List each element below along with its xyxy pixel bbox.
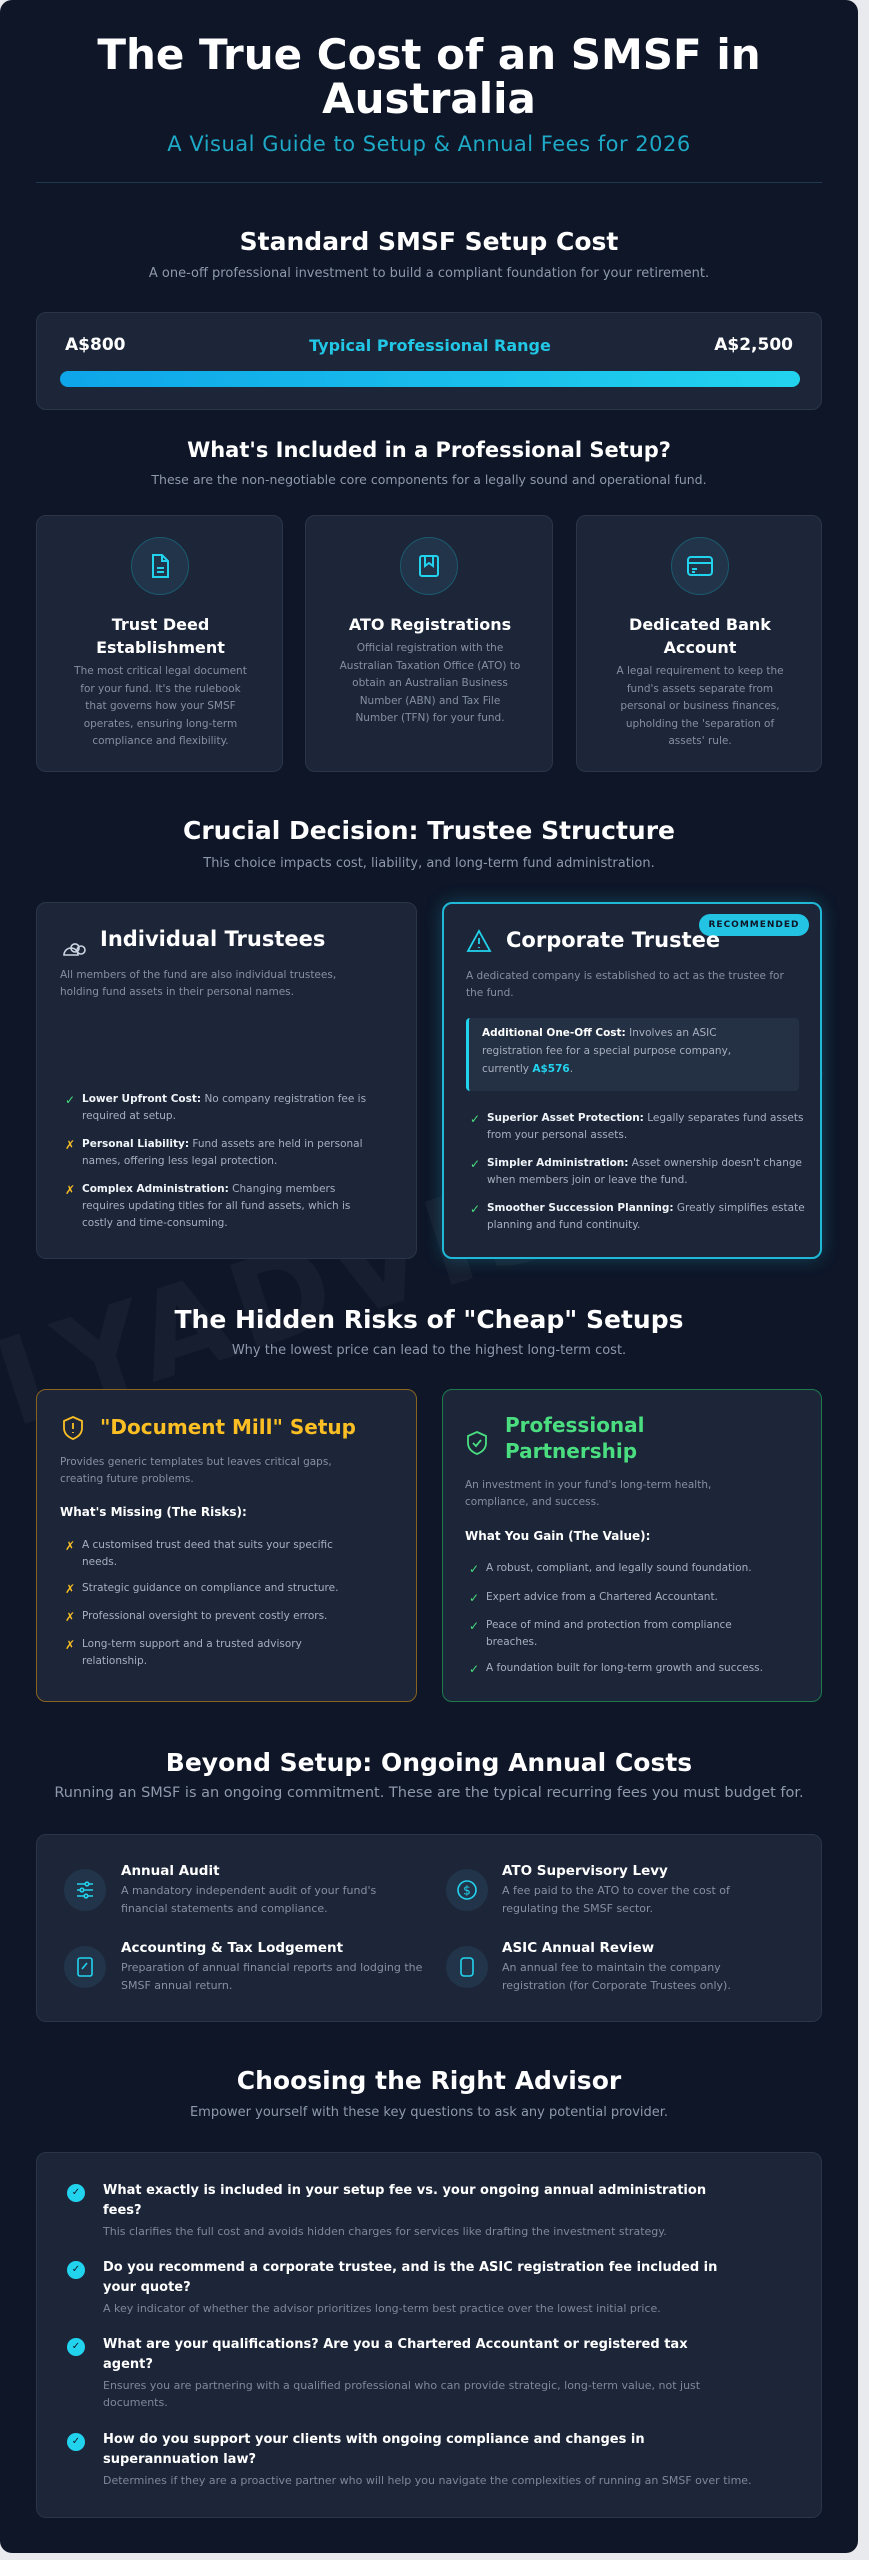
title: Australia	[322, 74, 536, 123]
text: that governs how your SMSF	[85, 700, 236, 712]
label range: Typical Professional Range	[309, 336, 551, 355]
title	[505, 1413, 645, 1463]
question 4: How do you support your clients with ongoing compliance and changes in superannuation law?	[103, 2432, 645, 2467]
heading: advisor: Choosing the Right Advisor	[237, 2066, 621, 2095]
list	[470, 1112, 805, 1231]
icon: shield alert	[63, 1416, 83, 1440]
text: obtain an Australian Business	[352, 677, 508, 689]
question 1: ✓	[72, 2187, 80, 2198]
list: Complex Administration: Changing members requires updating titles for all fund assets, which is costly and time-consuming.	[82, 1183, 350, 1229]
list: ✓	[469, 1619, 479, 1633]
item: audit: Annual Audit	[121, 1863, 220, 1879]
item: accounting	[64, 1940, 422, 1992]
list	[65, 1093, 366, 1229]
list: A robust, compliant, and legally sound foundation.	[486, 1562, 752, 1574]
icon: users	[63, 943, 86, 956]
text: Official registration with the	[357, 642, 503, 654]
card: bank	[576, 515, 822, 772]
title: "Document Mill" Setup	[100, 1415, 356, 1439]
subtext: annual: Running an SMSF is an ongoing commitment. These are the typical recurring fees you must budget for.	[54, 1785, 804, 1801]
list: ✗	[65, 1138, 75, 1152]
list: ✓	[469, 1662, 479, 1676]
list: A foundation built for long-term growth and success.	[486, 1662, 763, 1674]
text: personal or business finances,	[620, 700, 780, 712]
title: Trust Deed	[112, 615, 209, 634]
panel: corporate trustee	[442, 902, 822, 1259]
item: levy	[446, 1863, 730, 1915]
question 2: Do you recommend a corporate trustee, and is the ASIC registration fee included in your quote?	[103, 2260, 717, 2295]
list: ✗	[65, 1582, 75, 1596]
text: The most critical legal document	[74, 665, 247, 677]
item: accounting: Preparation of annual financial reports and lodging the SMSF annual return.	[121, 1961, 422, 1992]
subheading: What's Missing (The Risks):	[60, 1505, 247, 1519]
title: Establishment	[96, 638, 225, 657]
title: Partnership	[505, 1439, 637, 1463]
subtext: advisor: Empower yourself with these key questions to ask any potential provider.	[190, 2105, 668, 2120]
text	[616, 665, 784, 747]
heading: trustee: Crucial Decision: Trustee Structure	[183, 816, 675, 845]
question 2: A key indicator of whether the advisor prioritizes long-term best practice over the lowest initial price.	[103, 2302, 661, 2315]
text: operates, ensuring long-term	[84, 718, 237, 730]
subtext: trustee: This choice impacts cost, liability, and long-term fund administration.	[203, 856, 655, 871]
panel: individual trustees	[36, 902, 417, 1259]
list: ✓	[470, 1112, 480, 1126]
watermark: LYADVISORY	[0, 1049, 858, 1455]
question 2: ✓	[72, 2264, 80, 2275]
list	[469, 1562, 763, 1676]
text: Provides generic templates but leaves critical gaps, creating future problems.	[60, 1456, 332, 1485]
text: compliance and flexibility.	[92, 735, 229, 747]
question 3	[67, 2337, 700, 2409]
list: Smoother Succession Planning: Greatly simplifies estate planning and fund continuity.	[487, 1202, 805, 1231]
list: A customised trust deed that suits your specific needs.	[82, 1539, 333, 1568]
list: ✓	[65, 1093, 75, 1107]
heading: risks: The Hidden Risks of "Cheap" Setups	[174, 1305, 684, 1334]
question 3: Ensures you are partnering with a qualified professional who can provide strategic, long-term value, not just documents.	[103, 2379, 700, 2409]
item: asic: ASIC Annual Review	[502, 1940, 654, 1956]
label min: A$800	[65, 335, 125, 355]
range bar	[60, 371, 800, 387]
text: Australian Taxation Office (ATO) to	[340, 660, 520, 672]
item: levy: ATO Supervisory Levy	[502, 1863, 668, 1879]
icon: card	[671, 537, 729, 595]
list: Peace of mind and protection from compliance breaches.	[486, 1619, 732, 1648]
list: ✓	[470, 1157, 480, 1171]
list: Lower Upfront Cost: No company registration fee is required at setup.	[82, 1093, 366, 1122]
question 3: ✓	[72, 2341, 80, 2352]
callout: cost	[466, 1018, 799, 1091]
list: Personal Liability: Fund assets are held in personal names, offering less legal protection.	[82, 1138, 363, 1167]
item: accounting: Accounting & Tax Lodgement	[121, 1940, 343, 1956]
text: fund's assets separate from	[627, 682, 773, 694]
title: Professional	[505, 1413, 645, 1437]
list: ✓	[469, 1591, 479, 1605]
icon: document	[131, 537, 189, 595]
subheading: What You Gain (The Value):	[465, 1529, 650, 1543]
text: Number (TFN) for your fund.	[355, 712, 505, 724]
list: Strategic guidance on compliance and structure.	[82, 1582, 338, 1594]
title	[629, 615, 772, 657]
list: Superior Asset Protection: Legally separates fund assets from your personal assets.	[487, 1112, 803, 1141]
subtext: setup cost: A one-off professional investment to build a compliant foundation for your retirement.	[149, 266, 709, 281]
item: audit	[64, 1863, 376, 1915]
badge	[699, 914, 809, 936]
text: A dedicated company is established to act as the trustee for the fund.	[466, 970, 784, 999]
list	[65, 1539, 338, 1667]
icon: warning	[466, 929, 492, 952]
title: ATO Registrations	[349, 615, 511, 634]
question 4	[67, 2432, 752, 2487]
title	[97, 30, 761, 123]
title: Individual Trustees	[100, 927, 325, 951]
icon: book	[400, 537, 458, 595]
title: Corporate Trustee	[506, 928, 720, 952]
text: Number (ABN) and Tax File	[360, 694, 500, 706]
list: ✗	[65, 1638, 75, 1652]
list: ✗	[65, 1610, 75, 1624]
badge: RECOMMENDED	[708, 920, 800, 930]
heading: included: What's Included in a Professional Setup?	[187, 438, 671, 462]
item: asic: An annual fee to maintain the company registration (for Corporate Trustees only).	[502, 1961, 731, 1992]
text	[340, 642, 520, 724]
item: levy: $	[463, 1884, 471, 1898]
text: upholding the 'separation of	[626, 718, 774, 730]
text: All members of the fund are also individual trustees, holding fund assets in their personal names.	[60, 969, 336, 998]
panel: document mill	[36, 1389, 417, 1702]
subtitle: A Visual Guide to Setup & Annual Fees for 2026	[167, 132, 691, 156]
list: ✓	[469, 1562, 479, 1576]
text: A legal requirement to keep the	[616, 665, 784, 677]
title: Account	[664, 638, 736, 657]
list: Professional oversight to prevent costly errors.	[82, 1610, 327, 1622]
question 1	[67, 2183, 706, 2238]
subtext: included: These are the non-negotiable core components for a legally sound and operational fund.	[151, 472, 707, 487]
heading: setup cost: Standard SMSF Setup Cost	[240, 227, 618, 256]
card: trust deed	[36, 515, 283, 772]
question 1: What exactly is included in your setup fee vs. your ongoing annual administration fees?	[103, 2183, 706, 2218]
title: The True Cost of an SMSF in	[97, 30, 761, 79]
item: levy: A fee paid to the ATO to cover the cost of regulating the SMSF sector.	[502, 1884, 730, 1915]
list: Expert advice from a Chartered Accountant.	[486, 1591, 718, 1603]
list: ✗	[65, 1539, 75, 1553]
question 1: This clarifies the full cost and avoids hidden charges for services like drafting the investment strategy.	[103, 2225, 667, 2238]
panel: annual costs	[36, 1834, 822, 2022]
item: asic	[446, 1940, 731, 1992]
text: for your fund. It's the rulebook	[80, 682, 241, 694]
label max: A$2,500	[714, 335, 793, 355]
heading: annual: Beyond Setup: Ongoing Annual Costs	[166, 1748, 692, 1777]
text: assets' rule.	[668, 735, 732, 747]
question 4: ✓	[72, 2436, 80, 2447]
callout: cost: Additional One-Off Cost: Involves an ASIC registration fee for a special purpose company, currently A$576.	[482, 1027, 731, 1075]
panel: questions	[36, 2152, 822, 2518]
icon: shield check	[467, 1431, 487, 1455]
list: ✗	[65, 1183, 75, 1197]
question 4: Determines if they are a proactive partner who will help you navigate the complexities of running an SMSF over time.	[103, 2474, 752, 2487]
subtext: risks: Why the lowest price can lead to the highest long-term cost.	[232, 1343, 626, 1358]
panel: range	[36, 312, 822, 410]
list: ✓	[470, 1202, 480, 1216]
text: An investment in your fund's long-term health, compliance, and success.	[465, 1479, 711, 1508]
panel: professional partnership	[442, 1389, 822, 1702]
title: Dedicated Bank	[629, 615, 771, 634]
list: Long-term support and a trusted advisory relationship.	[82, 1638, 302, 1667]
card: ATO	[305, 515, 553, 772]
question 3: What are your qualifications? Are you a Chartered Accountant or registered tax agent?	[103, 2337, 688, 2372]
item: audit: A mandatory independent audit of your fund's financial statements and compliance.	[121, 1884, 376, 1915]
question 2	[67, 2260, 717, 2315]
text	[74, 665, 247, 747]
list: Simpler Administration: Asset ownership doesn't change when members join or leave the fund.	[487, 1157, 802, 1186]
title	[96, 615, 225, 657]
